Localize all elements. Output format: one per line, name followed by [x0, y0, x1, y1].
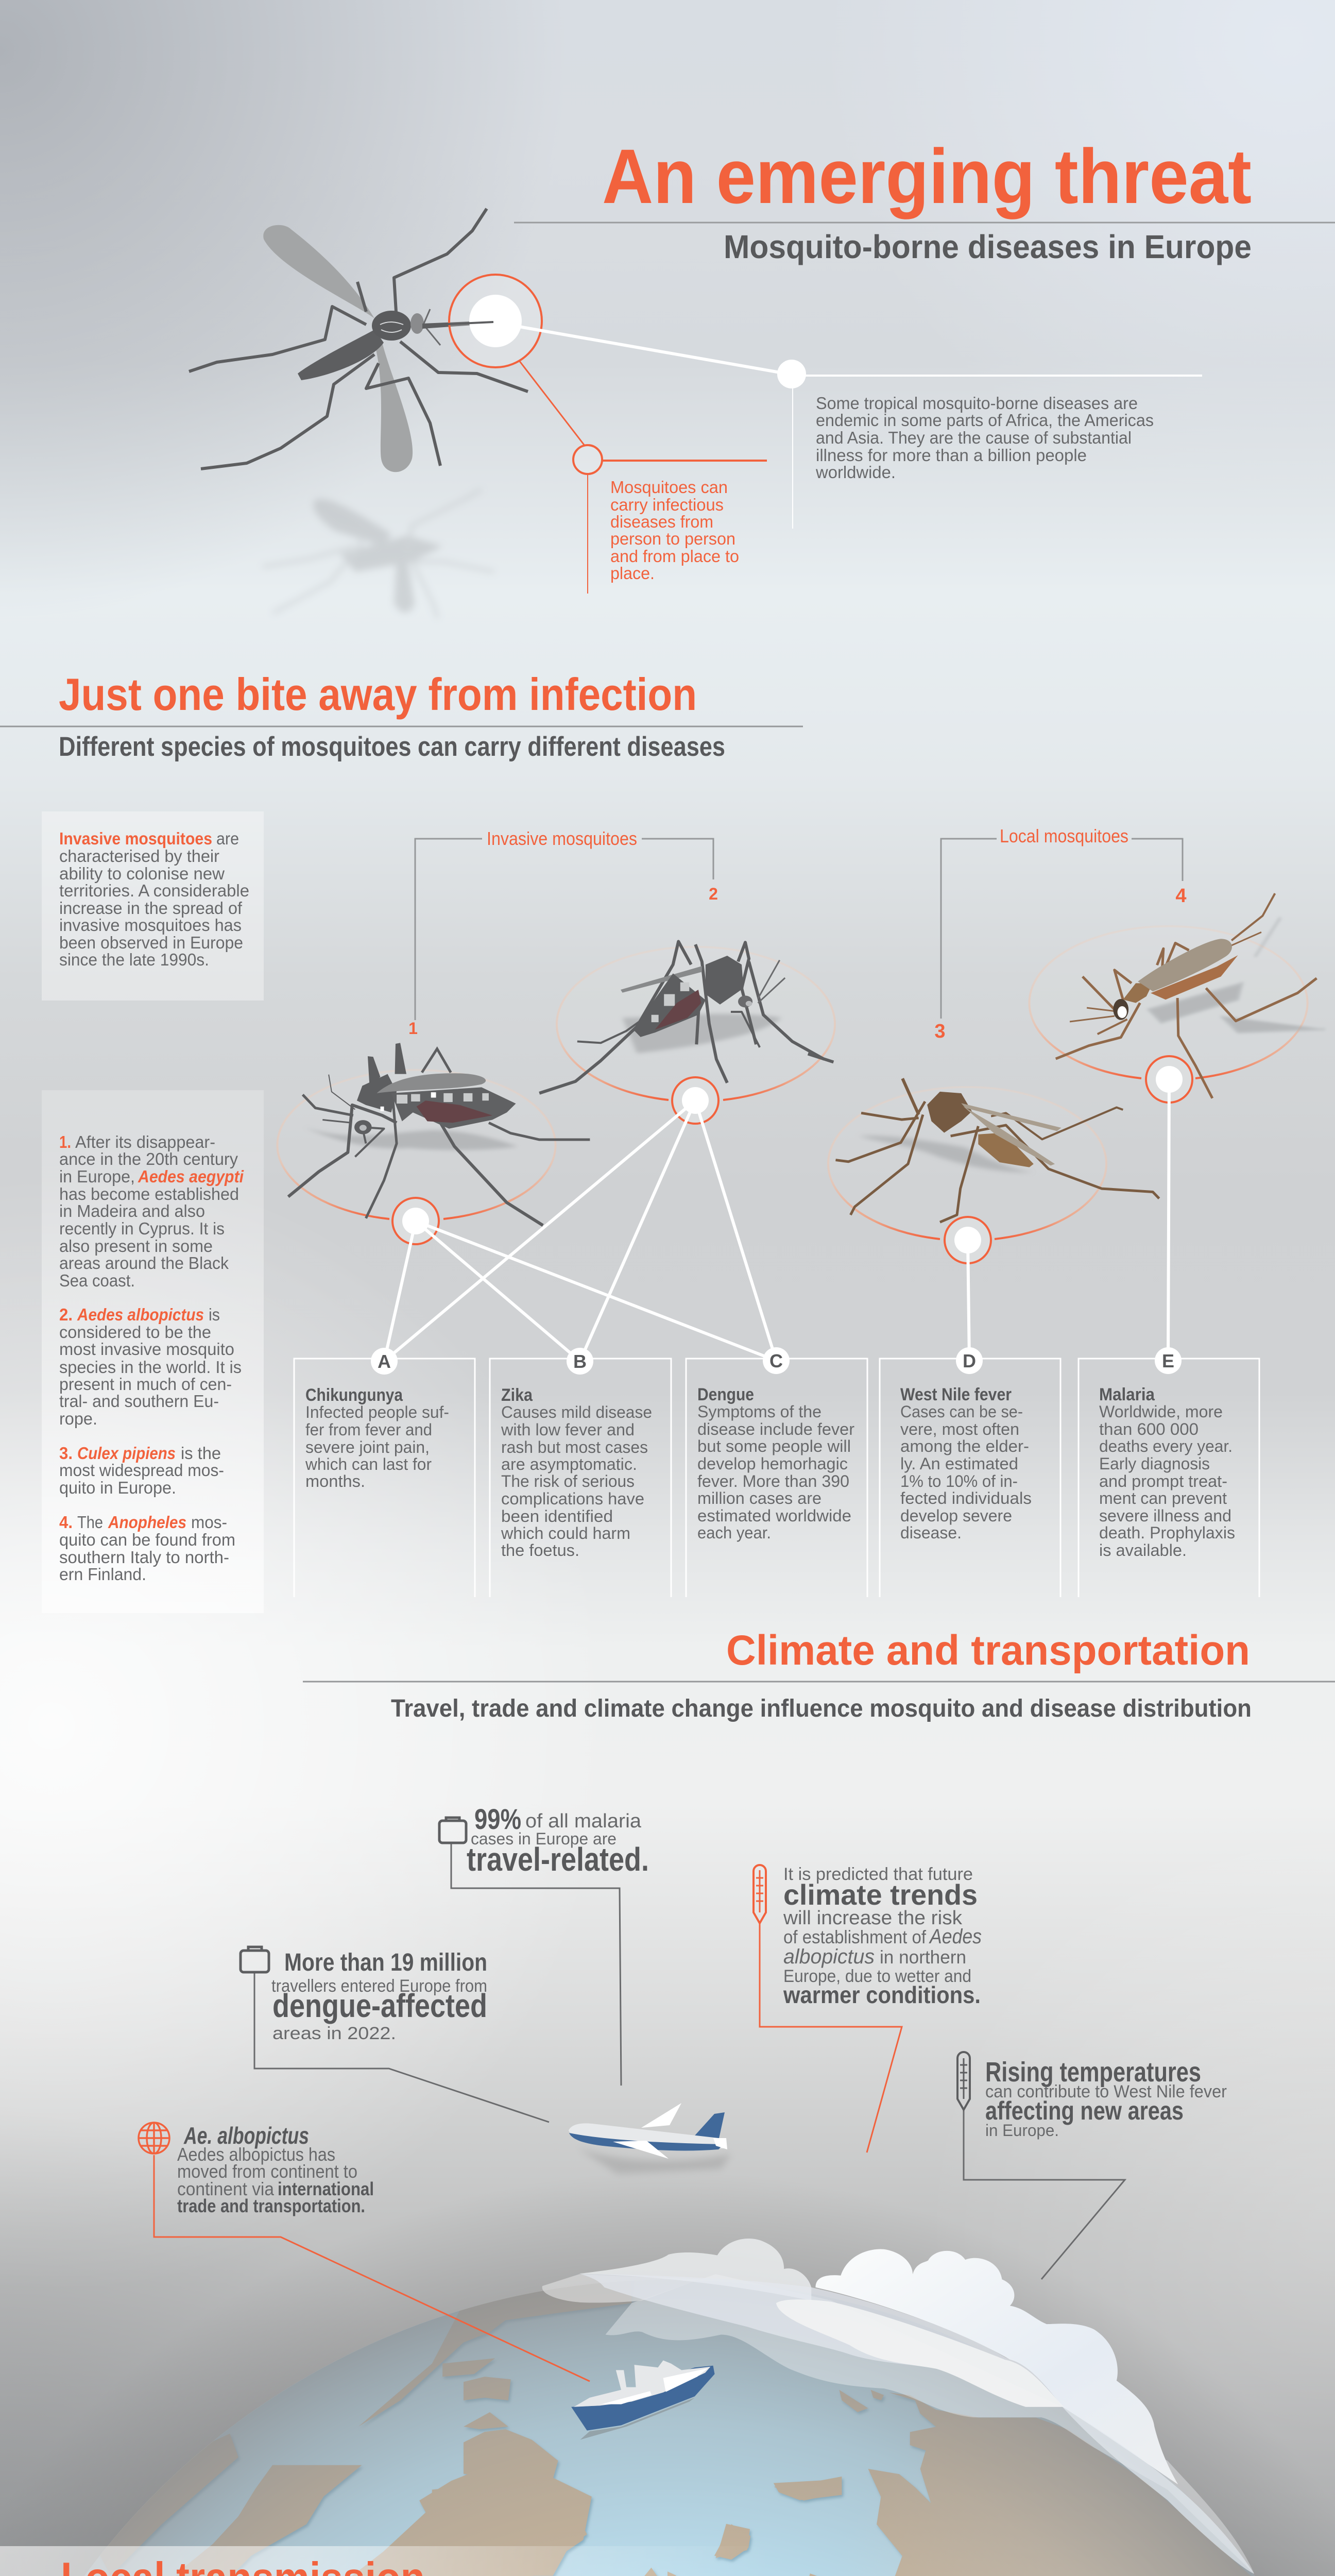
callout: climate trends: in northern — [880, 1946, 966, 1968]
icon: mosquito 1 Aedes aegypti — [288, 1043, 590, 1225]
card: Chikungunya: fer from fever and — [305, 1420, 432, 1439]
callout: dengue travellers — [241, 1947, 549, 2122]
callout: dengue travellers: areas in 2022. — [272, 2024, 396, 2043]
callout: malaria travel-related: cases in Europe are — [471, 1829, 617, 1848]
panel: disease cards — [294, 1347, 1259, 1597]
card: Zika: the foetus. — [501, 1541, 579, 1560]
panel: species descriptions: Anopheles — [108, 1513, 186, 1532]
panel: invasive mosquitoes text: been observed in Europe — [59, 933, 243, 952]
callout: malaria travel-related: of all malaria — [525, 1810, 642, 1832]
callout: malaria travel-related: travel-related. — [467, 1841, 649, 1878]
heading: just one bite — [0, 669, 803, 762]
card: Chikungunya — [305, 1348, 449, 1490]
panel: species descriptions: recently in Cyprus. It is — [59, 1219, 225, 1238]
card: Zika: Causes mild disease — [501, 1403, 652, 1421]
callout: carry diseases: person to person — [610, 529, 735, 548]
panel: species descriptions: tral- and southern Eu- — [59, 1392, 219, 1411]
icon: globe orange — [139, 2123, 169, 2154]
callout: dengue travellers: More than 19 million — [284, 1949, 487, 1976]
icon: mosquito 4 Anopheles — [1056, 893, 1325, 1098]
card: Malaria: ment can prevent — [1099, 1489, 1227, 1507]
panel: species descriptions: mos- — [191, 1513, 227, 1532]
card: West Nile fever: vere, most often — [900, 1420, 1019, 1438]
card: Malaria: Malaria — [1099, 1385, 1155, 1404]
panel: invasive mosquitoes text: ability to colonise new — [59, 864, 225, 883]
callout: malaria travel-related — [439, 1803, 649, 2086]
icon: suitcase — [241, 1947, 269, 1972]
card: Zika: with low fever and — [501, 1420, 635, 1439]
icon: mosquito 3 Culex pipiens — [835, 1078, 1159, 1222]
card: Dengue: Dengue — [697, 1385, 754, 1404]
halo behind globe — [0, 2112, 1335, 2576]
callout: dengue travellers: dengue-affected — [272, 1987, 487, 2024]
callout: climate trends: of establishment of — [783, 1926, 927, 1947]
panel: species descriptions: also present in some — [59, 1236, 213, 1256]
callout: Ae. albopictus: Ae. albopictus — [183, 2122, 309, 2149]
panel: species descriptions: considered to be the — [59, 1323, 211, 1342]
panel: species descriptions: rope. — [59, 1409, 97, 1428]
panel: species descriptions: quito can be found from — [59, 1530, 235, 1549]
card: West Nile fever: Cases can be se- — [900, 1402, 1023, 1421]
connectors: mosquitoes to diseases — [384, 1056, 1192, 1361]
card: Zika: Zika — [501, 1385, 533, 1405]
callout: endemic: and Asia. They are the cause of substantial — [816, 428, 1132, 447]
callout: Ae. albopictus — [139, 2122, 590, 2381]
bracket: invasive mosquitoes — [408, 828, 718, 1038]
bracket: local mosquitoes: Local mosquitoes — [1000, 825, 1128, 846]
bracket: local mosquitoes: 4 — [1175, 885, 1187, 907]
card: West Nile fever: fected individuals — [900, 1489, 1032, 1507]
card: Chikungunya: Infected people suf- — [305, 1403, 449, 1421]
card: Chikungunya: severe joint pain, — [305, 1438, 430, 1456]
panel: species descriptions: most widespread mos- — [59, 1461, 224, 1480]
subtitle: Mosquito-borne diseases in Europe — [724, 228, 1252, 265]
globe shading — [84, 2282, 1255, 2576]
card: Dengue: million cases are — [697, 1489, 821, 1507]
card: Zika: The risk of serious — [501, 1472, 635, 1490]
panel: species descriptions: areas around the Black — [59, 1253, 229, 1273]
card: Malaria: deaths every year. — [1099, 1437, 1233, 1455]
globe map — [84, 2291, 1255, 2576]
panel: species descriptions: ance in the 20th century — [59, 1149, 238, 1168]
panel: species descriptions: most invasive mosquito — [59, 1340, 234, 1359]
icon: thermometer orange — [754, 1865, 766, 1923]
icon: ship — [571, 2360, 715, 2440]
card: Malaria: E — [1162, 1350, 1174, 1371]
callout: rising temperatures: affecting new areas — [985, 2096, 1184, 2125]
heading: just one bite: Just one bite away from infection — [59, 669, 697, 720]
panel: species descriptions: southern Italy to north- — [59, 1548, 229, 1567]
panel: invasive mosquitoes text: invasive mosquitoes has — [59, 916, 242, 935]
bracket: invasive mosquitoes: Invasive mosquitoes — [487, 828, 637, 849]
panel: species descriptions: has become established — [59, 1184, 239, 1204]
callout: Ae. albopictus: continent via — [177, 2178, 275, 2199]
icon: mosquito 2 leg tip — [808, 1054, 833, 1062]
card: West Nile fever — [900, 1347, 1032, 1542]
panel: invasive mosquitoes text: are — [216, 829, 239, 848]
callout: carry diseases — [519, 361, 767, 594]
card: Malaria: Early diagnosis — [1099, 1454, 1210, 1473]
card: Chikungunya: months. — [305, 1472, 365, 1490]
heading: just one bite: Different species of mosquitoes can carry different diseases — [59, 732, 725, 762]
panel: invasive mosquitoes text: territories. A considerable — [59, 881, 249, 900]
callout: climate trends: albopictus — [783, 1945, 875, 1968]
icon: thermometer grey — [957, 2052, 970, 2110]
panel: species descriptions — [42, 1090, 264, 1613]
callout: endemic: illness for more than a billion people — [816, 446, 1087, 465]
icon: mosquito shadow — [263, 489, 494, 618]
title: An emerging threat — [602, 133, 1252, 219]
card: Dengue: develop hemorhagic — [697, 1454, 848, 1473]
callout: climate trends — [754, 1865, 982, 2153]
card: Malaria: Worldwide, more — [1099, 1402, 1223, 1421]
diagram: mosquito rings and connectors — [277, 926, 1307, 1239]
callout: endemic — [519, 327, 1202, 529]
card: West Nile fever: 1% to 10% of in- — [900, 1472, 1018, 1490]
panel: species descriptions: present in much of cen- — [59, 1375, 232, 1394]
node: big ring on the proboscis — [438, 275, 542, 367]
card: Zika: been identified — [501, 1507, 613, 1526]
heading: climate and transportation: Travel, trade and climate change influence mosquito and disease distribution — [391, 1695, 1252, 1722]
callout: Ae. albopictus: Aedes albopictus has — [177, 2144, 335, 2165]
panel: invasive mosquitoes text: characterised by their — [59, 846, 219, 866]
card: West Nile fever: D — [963, 1350, 976, 1371]
panel: species descriptions: in Europe, — [59, 1167, 135, 1186]
panel: species descriptions: species in the world. It is — [59, 1358, 242, 1377]
card: Chikungunya: A — [378, 1351, 391, 1372]
panel: local transmission heading — [0, 2546, 773, 2576]
bracket: local mosquitoes: 3 — [934, 1021, 946, 1042]
callout: rising temperatures: can contribute to West Nile fever — [985, 2082, 1227, 2102]
card: Chikungunya: which can last for — [305, 1455, 432, 1473]
callout: carry diseases: Mosquitoes can — [610, 478, 728, 497]
clouds — [542, 2239, 1254, 2574]
panel: header with mosquito — [189, 133, 1335, 618]
card: Dengue: each year. — [697, 1523, 771, 1542]
panel: species descriptions: 2. — [59, 1305, 73, 1324]
callout: carry diseases: diseases from — [610, 512, 713, 531]
heading: climate and transportation: Climate and transportation — [726, 1627, 1250, 1674]
callout: carry diseases: carry infectious — [610, 495, 724, 514]
bracket: local mosquitoes — [934, 825, 1187, 1042]
callout: endemic: Some tropical mosquito-borne diseases are — [816, 394, 1138, 413]
icon: mosquito top view — [189, 209, 528, 472]
panel: invasive mosquitoes text: since the late 1990s. — [59, 950, 209, 969]
card: Malaria: severe illness and — [1099, 1506, 1231, 1525]
card: Dengue: fever. More than 390 — [697, 1472, 849, 1490]
card: Zika: complications have — [501, 1489, 644, 1508]
card: Dengue: C — [769, 1350, 783, 1371]
card: Malaria — [1099, 1347, 1235, 1560]
card: Malaria: than 600 000 — [1099, 1420, 1199, 1438]
panel: invasive mosquitoes text: increase in the spread of — [59, 899, 243, 918]
callout: carry diseases: place. — [610, 564, 655, 583]
callout: rising temperatures — [957, 2052, 1227, 2279]
callout: dengue travellers: travellers entered Europe from — [271, 1976, 487, 1996]
card: West Nile fever: West Nile fever — [900, 1385, 1012, 1404]
callout: endemic: worldwide. — [815, 463, 896, 482]
panel: species descriptions: 3. — [59, 1444, 73, 1463]
panel: species descriptions: Aedes albopictus — [77, 1305, 204, 1324]
card: Zika: B — [573, 1351, 587, 1372]
callout: rising temperatures: in Europe. — [985, 2121, 1059, 2140]
callout: Ae. albopictus: moved from continent to — [177, 2161, 357, 2182]
card: Zika — [501, 1348, 652, 1560]
panel: invasive mosquitoes text: Invasive mosquitoes — [59, 829, 212, 848]
land masses — [101, 2291, 1251, 2576]
card: Dengue: estimated worldwide — [697, 1506, 851, 1525]
card: Dengue: Symptoms of the — [697, 1402, 821, 1421]
icon: suitcase — [439, 1818, 466, 1843]
callout: climate trends: Europe, due to wetter and — [783, 1967, 971, 1986]
panel: species descriptions: The — [77, 1513, 103, 1532]
card: Zika: which could harm — [501, 1524, 630, 1543]
card: Malaria: and prompt treat- — [1099, 1472, 1227, 1490]
callout: Ae. albopictus: international — [278, 2178, 374, 2199]
panel: species descriptions: in Madeira and also — [59, 1201, 205, 1221]
card: Malaria: death. Prophylaxis — [1099, 1523, 1235, 1542]
card: Zika: rash but most cases — [501, 1438, 648, 1456]
callout: malaria travel-related: 99% — [474, 1803, 521, 1835]
bracket: invasive mosquitoes: 2 — [709, 885, 718, 903]
callout: climate trends: warmer conditions. — [783, 1981, 981, 2008]
icon: mosquito 2 Aedes albopictus — [539, 941, 824, 1093]
callout: rising temperatures: Rising temperatures — [985, 2057, 1201, 2088]
callout: climate trends: Aedes — [929, 1925, 982, 1948]
panel: species descriptions: Aedes aegypti — [138, 1167, 244, 1186]
panel: species descriptions: 1. — [59, 1132, 71, 1151]
panel: species descriptions: After its disappear- — [75, 1132, 215, 1151]
callout: climate trends: It is predicted that future — [783, 1865, 973, 1884]
panel: invasive mosquitoes text — [42, 811, 264, 1001]
callout: climate trends: will increase the risk — [783, 1907, 963, 1929]
card: Dengue: disease include fever — [697, 1420, 854, 1438]
card: Malaria: is available. — [1099, 1541, 1187, 1560]
callout: endemic: endemic in some parts of Africa, the Americas — [816, 411, 1154, 430]
panel: species descriptions: is the — [181, 1444, 221, 1463]
panel: species descriptions: Culex pipiens — [77, 1444, 176, 1463]
callout: climate trends: climate trends — [783, 1878, 978, 1911]
card: Dengue: but some people will — [697, 1437, 851, 1455]
card: Zika: are asymptomatic. — [501, 1455, 637, 1473]
card: Dengue — [697, 1347, 854, 1542]
icon: airplane — [569, 2103, 731, 2174]
panel: species descriptions: quito in Europe. — [59, 1478, 176, 1497]
panel: species descriptions: is — [209, 1305, 220, 1324]
card: West Nile fever: disease. — [900, 1523, 962, 1542]
callout: carry diseases: and from place to — [610, 547, 739, 566]
panel: species descriptions: 4. — [59, 1513, 73, 1532]
card: West Nile fever: develop severe — [900, 1506, 1012, 1525]
bracket: invasive mosquitoes: 1 — [408, 1019, 418, 1038]
callout: Ae. albopictus: trade and transportation. — [177, 2195, 365, 2216]
card: West Nile fever: among the elder- — [900, 1437, 1029, 1455]
heading: climate and transportation — [303, 1627, 1335, 1722]
card: Chikungunya: Chikungunya — [305, 1385, 403, 1405]
panel: species descriptions: Sea coast. — [59, 1271, 135, 1290]
card: West Nile fever: ly. An estimated — [900, 1454, 1018, 1473]
panel: species descriptions: ern Finland. — [59, 1565, 146, 1584]
